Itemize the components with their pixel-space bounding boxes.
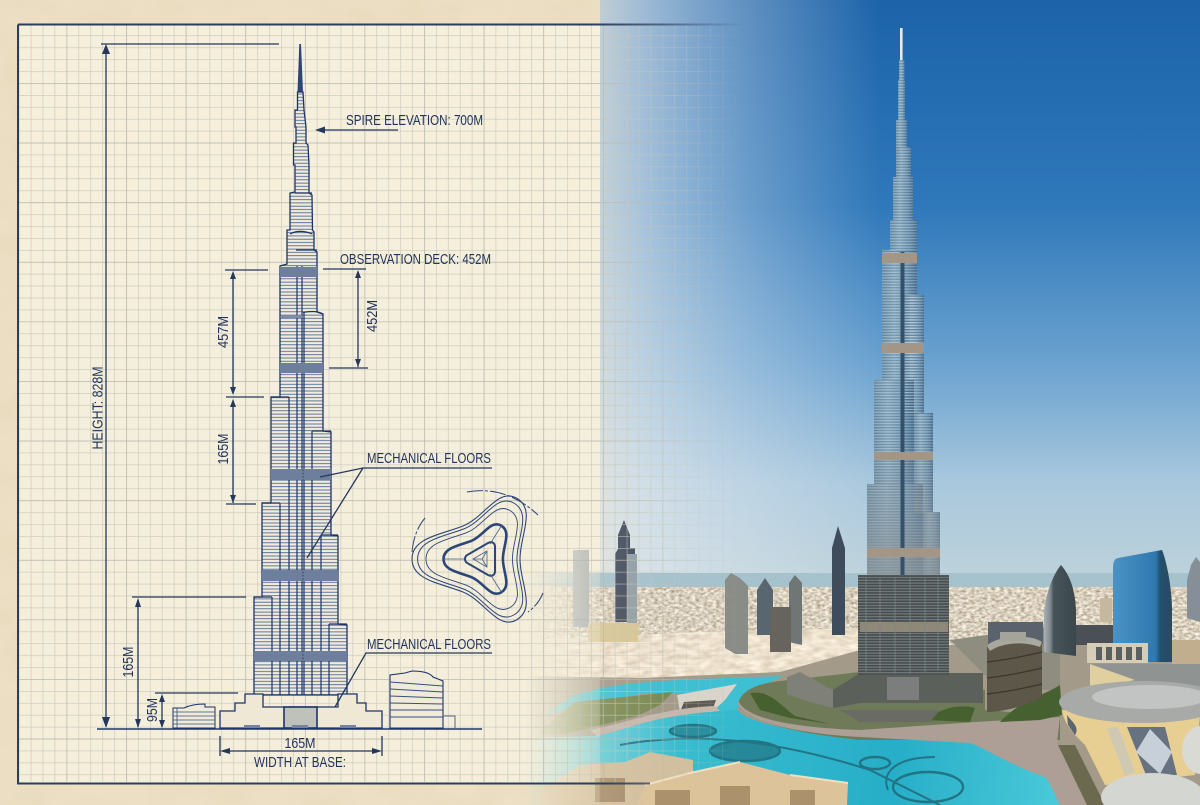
icon: trefoil floor plan sketch (412, 491, 543, 622)
blueprint: neighbouring curved building (390, 671, 455, 728)
right-side skyscrapers (988, 550, 1200, 663)
photo scene: Dubai skyline, lake and malls (525, 520, 1200, 805)
dimension: upper 165M: 165M (215, 434, 232, 464)
ground base (525, 640, 1200, 805)
dimension: total height 828M: HEIGHT: 828M (90, 366, 106, 450)
dimension: lower 165M: 165M (120, 646, 137, 678)
dimension: lower 165M (120, 597, 246, 728)
graph paper grid (19, 25, 745, 782)
low annex with windows (1087, 643, 1148, 663)
promenade (738, 700, 1087, 805)
dimension: 95M (144, 693, 238, 728)
sea horizon (540, 573, 1189, 587)
dimension: 452M: 452M (364, 300, 381, 332)
mechanical floor bands (254, 267, 347, 661)
stepped podium (220, 694, 382, 728)
callout: observation deck: OBSERVATION DECK: 452M (340, 251, 491, 268)
podium garden (738, 672, 1060, 740)
blueprint: neighbouring low building (173, 704, 215, 728)
dimension: 95M: 95M (144, 698, 161, 722)
dimension: total height 828M (90, 44, 279, 728)
dimension: width at base: WIDTH AT BASE: (254, 754, 346, 771)
podium (787, 672, 983, 722)
dimension: 457M (215, 270, 268, 397)
dimension: 457M: 457M (215, 316, 232, 348)
tower setback bands (860, 253, 948, 632)
lawn pavilion (677, 684, 737, 712)
callout: lower mechanical floors (335, 636, 492, 707)
callout: spire elevation (315, 112, 483, 134)
far towers (573, 520, 845, 654)
blueprint: tower elevation drawing (220, 44, 382, 728)
gardens (750, 685, 1062, 724)
blueprint frame (18, 24, 745, 784)
photo: Burj Khalifa tower (858, 28, 949, 675)
dimension: width at base: 165M (284, 735, 316, 752)
round hotel building (987, 632, 1042, 712)
panel: blueprint paper (0, 0, 600, 805)
callout: upper mechanical floors (307, 450, 492, 558)
dimension: upper 165M (215, 399, 256, 504)
lawn (535, 692, 673, 735)
desert sand lots (525, 628, 860, 678)
lake (525, 710, 1060, 805)
lawn promenade (590, 706, 720, 736)
city band (525, 587, 1200, 645)
dimension: 452M (323, 269, 381, 368)
callout: lower mechanical floors: MECHANICAL FLOORS (367, 636, 491, 653)
ground line (97, 728, 482, 730)
shopping mall (1059, 664, 1200, 805)
shrubs beside mall (1058, 745, 1105, 805)
callout: upper mechanical floors: MECHANICAL FLOORS (367, 450, 491, 467)
dimension: width at base (220, 735, 382, 771)
fountain patterns (620, 725, 963, 805)
canal (545, 676, 782, 715)
panel: photo sky (600, 0, 1200, 590)
old town buildings (540, 752, 848, 805)
callout: spire elevation: SPIRE ELEVATION: 700M (346, 112, 483, 129)
